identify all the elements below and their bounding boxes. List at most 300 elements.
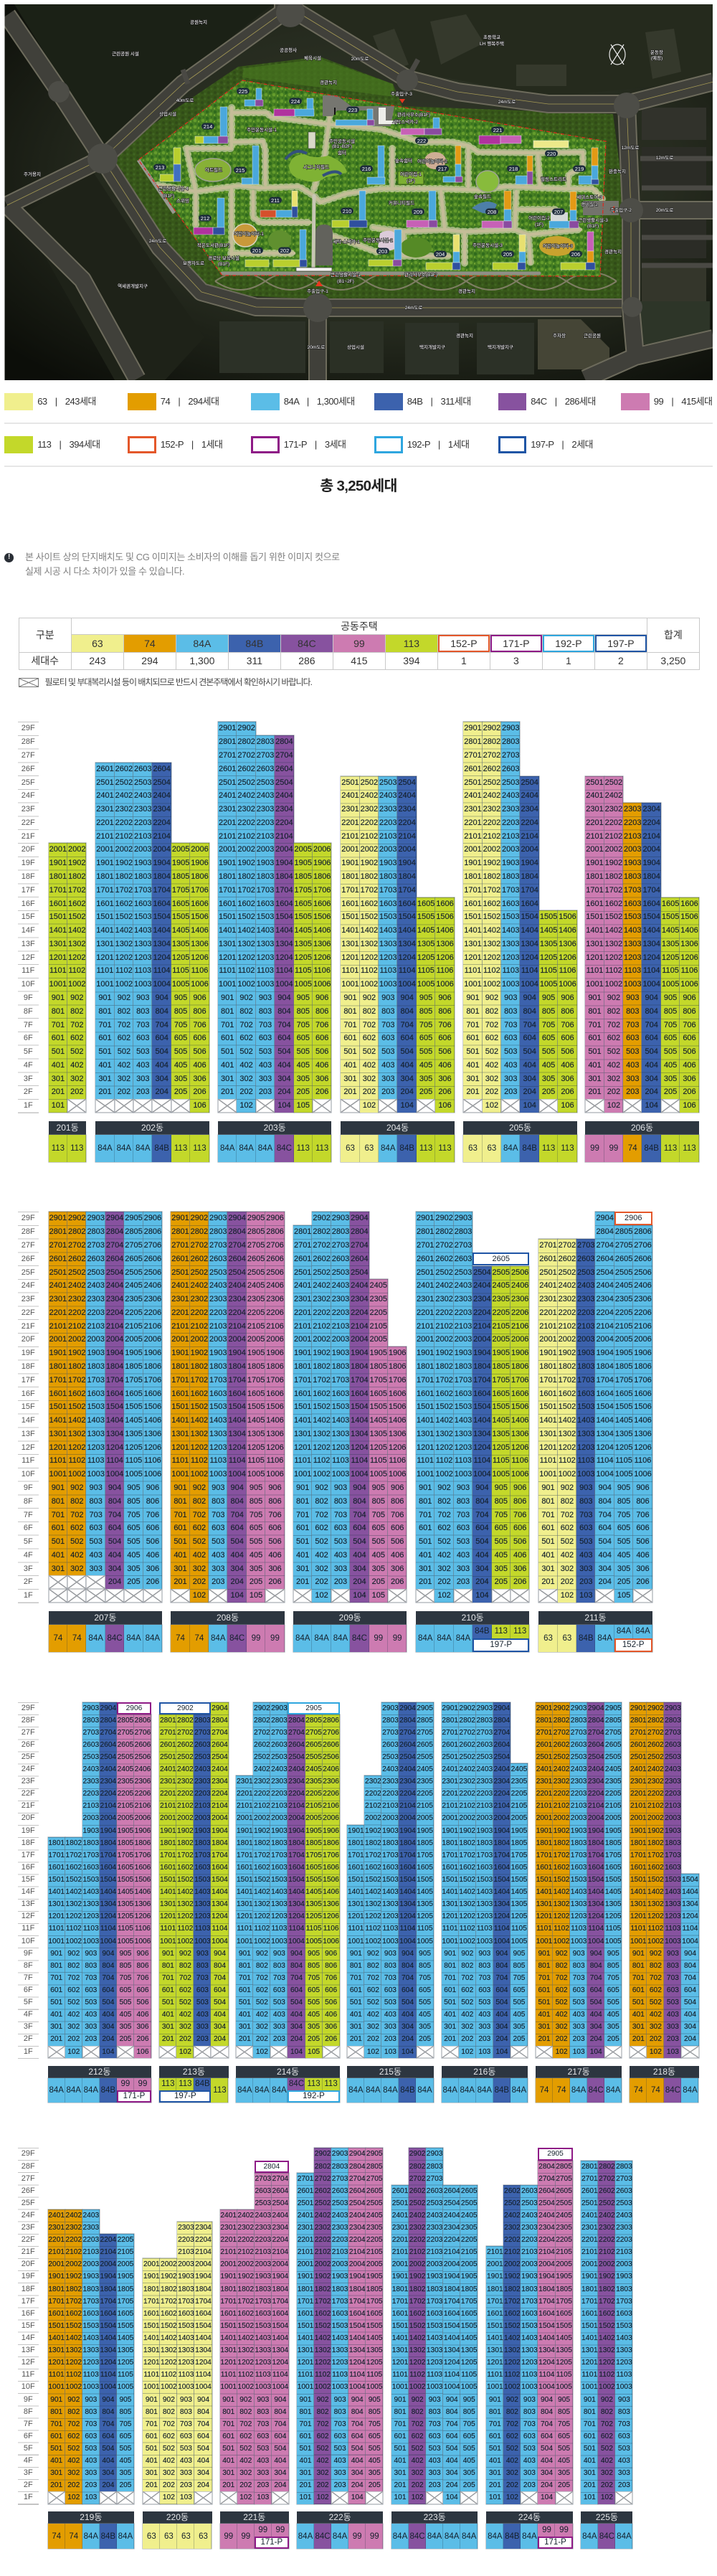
unit types: 84A [98,1144,113,1153]
building 208 [170,1212,171,1652]
unit types [391,2524,478,2549]
building number badges: 217 [438,166,447,172]
building 204 [340,722,341,1162]
building number badges: 213 [156,164,164,171]
unit stack 220 [143,2148,212,2504]
household summary table: 415 [351,655,368,666]
unit types: 74 [69,2532,78,2541]
unit stack 209: 2903 2803 2703 2603 2503 2403 2303 2203 2103 2003 1903 1803 1703 1603 1503 1403 1303 1203 1103 1003 903 803 703 603 503 403 303 203 [332,1214,349,1586]
map place labels: 24m도로 [149,238,166,244]
unit types: 113 [438,1144,452,1153]
unit types: 113 [213,2086,227,2095]
unit stack 217: 2905 2805 2705 2605 2505 2405 2305 2205 2105 2005 1905 1805 1705 1605 1505 1405 1305 1205 1105 1005 905 805 705 605 505 405 305 205 [605,1704,622,2043]
unit stack 222: 2902 2802 2702 2602 2502 2402 2302 2202 2102 2002 1902 1802 1702 1602 1502 1402 1302 1202 1102 1002 902 802 702 602 502 402 302 202 102 [315,2150,331,2501]
map place labels: (B1F) [587,224,599,229]
map place labels: 체육시설 [304,55,321,61]
map place labels: 주출입구-3 [391,90,412,97]
unit stack 220: 2303 2203 2103 2003 1903 1803 1703 1603 1503 1403 1303 1203 1103 1003 903 803 703 603 503 403 303 203 103 [178,2224,194,2501]
unit stack 221: 2703 2603 2503 2403 2303 2203 2103 2003 1903 1803 1703 1603 1503 1403 1303 1203 1103 1003 903 803 703 603 503 403 303 203 103 [255,2175,271,2501]
unit stack 210 [416,1212,529,1603]
building 202 [95,762,210,1163]
map place labels: 어린이놀이터-1 [234,230,264,237]
map place labels: 세탁스낵카-2 [392,118,418,125]
dong name [297,2511,383,2524]
unit stack 210: 2605 [493,1255,510,1263]
unit stack 215: 2904 2804 2704 2604 2504 2404 2304 2204 2104 2004 1904 1804 1704 1604 1504 1404 1304 1204 1104 1004 904 804 704 604 504 404 304 204 104 [399,1704,416,2056]
unit types: 84A [126,1634,141,1643]
unit stack 212 [48,1702,151,2058]
dong name: 219동 [80,2512,102,2522]
unit types: 74 [72,1634,82,1643]
legend 63: 63 | 243세대 [37,396,96,407]
dong name: 217동 [568,2066,590,2076]
building number badges: 207 [554,209,563,215]
map place labels: 근린생활시설-3 [578,217,608,223]
unit stack 208 [171,1212,285,1603]
unit types: 84A [427,2532,442,2541]
dong name: 222동 [329,2512,351,2522]
map place labels: (1F) [407,179,415,184]
unit types: 171-P [544,2538,566,2547]
unit stack 207: 2903 2803 2703 2603 2503 2403 2303 2203 2103 2003 1903 1803 1703 1603 1503 1403 1303 1203 1103 1003 903 803 703 603 503 403 303 [87,1214,105,1573]
building 225 [580,2148,581,2549]
site plan map [4,4,713,380]
unit stack 202: 2604 2504 2404 2304 2204 2104 2004 1904 1804 1704 1604 1504 1404 1304 1204 1104 1004 904 804 704 604 504 404 304 204 [153,765,171,1096]
site area [138,80,606,276]
roads [7,4,713,381]
unit stack 207: 2906 2806 2706 2606 2506 2406 2306 2206 2106 2006 1906 1806 1706 1606 1506 1406 1306 1206 1106 1006 906 806 706 606 506 406 306 206 [144,1214,161,1586]
total households heading: 총 3,250세대 [320,478,397,494]
unit types: 113 [179,2080,192,2088]
building 215 [346,1702,348,2103]
map place labels: 숲속필드 [474,194,491,199]
household summary table: 84A [193,638,211,649]
unit types [463,1135,577,1162]
building 206 [584,722,586,1162]
household summary table: 84B [245,638,263,649]
unit types [48,2077,151,2103]
dong name: 211동 [584,1613,607,1623]
unit types: 74 [52,2532,61,2541]
unit types: 99 [258,2526,267,2534]
unit types: 84A [571,2086,586,2095]
unit types: 84A [49,2086,64,2095]
unit types: 74 [651,2086,660,2095]
unit stack 220: 2304 2204 2104 2004 1904 1804 1704 1604 1504 1404 1304 1204 1104 1004 904 804 704 604 504 404 304 204 [195,2224,212,2489]
unit stack 206: 2303 2203 2103 2003 1903 1803 1703 1603 1503 1403 1303 1203 1103 1003 903 803 703 603 503 403 303 203 [624,805,642,1096]
unit stack 218: 2903 2803 2703 2603 2503 2403 2303 2203 2103 2003 1903 1803 1703 1603 1503 1403 1303 1203 1103 1003 903 803 703 603 503 403 303 203 103 [665,1704,681,2056]
building 207 [48,1212,49,1652]
map place labels: 아트필드 [205,166,222,173]
unit stack 208: 2905 2805 2705 2605 2505 2405 2305 2205 2105 2005 1905 1805 1705 1605 1505 1405 1305 1205 1105 1005 905 805 705 605 505 405 305 205 105 [247,1214,265,1600]
map place labels: 주차장 [553,332,566,339]
building number badges: 204 [436,251,445,258]
unit stack 214: 2905 [305,1704,322,1712]
dong name: 204동 [386,1123,409,1133]
unit types: 84A [333,1634,348,1643]
unit stack 205 [463,722,577,1113]
unit types: 84A [683,2086,698,2095]
unit types [581,2524,632,2549]
unit stack 205: 1505 1405 1305 1205 1105 1005 905 805 705 605 505 405 305 205 [540,912,557,1096]
building number badges: 201 [252,247,261,254]
unit types: 84A [348,2086,364,2095]
household summary table: 공동주택 [341,621,378,632]
unit types: 113 [513,1627,526,1636]
map place labels: 세탁·스낵카-1 [333,238,360,245]
floor labels [18,1212,39,1603]
dong name: 218동 [653,2066,675,2076]
unit stack 214: 2903 2803 2703 2603 2503 2403 2303 2203 2103 2003 1903 1803 1703 1603 1503 1403 1303 1203 1103 1003 903 803 703 603 503 403 303 203 [271,1704,288,2043]
legend 84B [374,393,471,410]
unit types [143,2524,212,2549]
floor labels: 29F 28F 27F 26F 25F 24F 23F 22F 21F 20F 19F 18F 17F 16F 15F 14F 13F 12F 11F 10F 9F 8F 7F 6F 5F 4F 3F 2F 1F [22,1214,35,1600]
dong name [630,2066,699,2077]
unit stack 201: 2002 1902 1802 1702 1602 1502 1402 1302 1202 1102 1002 902 802 702 602 502 402 302 202 [68,845,86,1096]
building number badges: 215 [236,167,244,174]
map place labels: 초등학교 [483,34,500,40]
map place labels: 주출입구-1 [307,288,328,294]
unit types: 84C [277,1144,292,1153]
building 218 [629,1702,630,2103]
unit types: 84A [295,1634,310,1643]
map place labels: 커뮤니티필드 [389,199,414,206]
unit types: 113 [561,1144,574,1153]
unit stack 224: 2603 2503 2403 2303 2203 2103 2003 1903 1803 1703 1603 1503 1403 1303 1203 1103 1003 903 803 703 603 503 403 303 203 [521,2187,538,2489]
map place labels: 상업시설 [347,344,364,350]
unit types: 197-P [490,1641,512,1649]
unit stack 205: 2901 2801 2701 2601 2501 2401 2301 2201 2101 2001 1901 1801 1701 1601 1501 1401 1301 1201 1101 1001 901 801 701 601 501 401 301 201 [464,724,482,1096]
unit types: 84B [495,2086,509,2095]
dong name [391,2511,478,2524]
unit stack 212: 2903 2803 2703 2603 2503 2403 2303 2203 2103 2003 1903 1803 1703 1603 1503 1403 1303 1203 1103 1003 903 803 703 603 503 403 303 203 [82,1704,99,2043]
building number badges: 212 [201,215,209,222]
dong name: 225동 [596,2512,618,2522]
unit stack 212: 2906 [126,1704,142,1712]
unit types: 63 [487,1144,496,1153]
unit types: 84A [88,1634,103,1643]
household summary table: 311 [247,655,262,666]
unit types: 74 [557,2086,566,2095]
unit types: 99 [224,2532,233,2541]
unit stack 205: 2902 2802 2702 2602 2502 2402 2302 2202 2102 2002 1902 1802 1702 1602 1502 1402 1302 1202 1102 1002 902 802 702 602 502 402 302 202 102 [483,724,500,1110]
unit types: 84C [108,1634,123,1643]
map place labels: 24m도로 [498,99,516,105]
unit types [297,2524,383,2549]
dong name [218,1121,331,1135]
unit types: 63 [147,2532,156,2541]
map place labels: 관리사무소(B1F) [404,271,437,278]
unit stack 215: 2302 2202 2102 2002 1902 1802 1702 1602 1502 1402 1302 1202 1102 1002 902 802 702 602 502 402 302 202 102 [365,1778,381,2056]
building 220 [142,2148,143,2549]
unit stack 209: 2902 2802 2702 2602 2502 2402 2302 2202 2102 2002 1902 1802 1702 1602 1502 1402 1302 1202 1102 1002 902 802 702 602 502 402 302 202 102 [313,1214,331,1600]
unit stack 225 [581,2148,632,2504]
legend 152-P [128,436,223,453]
unit stack 204: 2503 2403 2303 2203 2103 2003 1903 1803 1703 1603 1503 1403 1303 1203 1103 1003 903 803 703 603 503 403 303 203 [379,778,397,1096]
unit stack 212: 2806 2706 2606 2506 2406 2306 2206 2106 2006 1906 1806 1706 1606 1506 1406 1306 1206 1106 1006 906 806 706 606 506 406 306 206 106 [135,1717,151,2056]
map place labels: 택지개발지구 [419,344,445,350]
dong name [143,2511,212,2524]
unit types [538,1625,652,1652]
legend 99 [621,393,712,410]
unit types: 84B [399,1144,414,1153]
map place labels: 경비실-2 [581,201,598,207]
floor labels: 29F 28F 27F 26F 25F 24F 23F 22F 21F 20F 19F 18F 17F 16F 15F 14F 13F 12F 11F 10F 9F 8F 7F 6F 5F 4F 3F 2F 1F [22,1703,35,2056]
household summary table: 구분 [36,629,54,641]
household summary table: 294 [141,655,158,666]
unit types [49,1135,86,1162]
map place labels: 경관녹지 [604,248,622,255]
unit types: 74 [194,1634,204,1643]
unit stack 214: 2804 2704 2604 2504 2404 2304 2204 2104 2004 1904 1804 1704 1604 1504 1404 1304 1204 1104 1004 904 804 704 604 504 404 304 204 104 [288,1717,305,2056]
unit types [293,1625,407,1652]
legend 63 [4,393,96,410]
unit stack 214: 2806 2706 2606 2506 2406 2306 2206 2106 2006 1906 1806 1706 1606 1506 1406 1306 1206 1106 1006 906 806 706 606 506 406 306 206 [323,1717,339,2043]
table footnote: 필로티 및 부대복리시설 등이 배치되므로 반드시 견본주택에서 확인하시기 바랍니다. [44,677,312,687]
floor labels [18,722,39,1113]
unit stack 208: 2902 2802 2702 2602 2502 2402 2302 2202 2102 2002 1902 1802 1702 1602 1502 1402 1302 1202 1102 1002 902 802 702 602 502 402 302 202 102 [191,1214,208,1600]
unit stack 217: 2904 2804 2704 2604 2504 2404 2304 2204 2104 2004 1904 1804 1704 1604 1504 1404 1304 1204 1104 1004 904 804 704 604 504 404 304 204 104 [588,1704,604,2056]
unit stack 210: 2902 2802 2702 2602 2502 2402 2302 2202 2102 2002 1902 1802 1702 1602 1502 1402 1302 1202 1102 1002 902 802 702 602 502 402 302 202 102 [435,1214,453,1600]
unit stack 212: 2805 2705 2605 2505 2405 2305 2205 2105 2005 1905 1805 1705 1605 1505 1405 1305 1205 1105 1005 905 805 705 605 505 405 305 205 [118,1717,133,2043]
unit types: 84B [101,2086,115,2095]
map place labels: 주민운동시설-1 [247,126,277,133]
building 203 [217,721,332,1163]
dong name [49,1121,86,1135]
dong name [416,1611,529,1625]
unit types: 84A [239,1144,254,1153]
unit types: 84A [220,1144,234,1153]
unit types: 63 [181,2532,191,2541]
unit stack 214: 2805 2705 2605 2505 2405 2305 2205 2105 2005 1905 1805 1705 1605 1505 1405 1305 1205 1105 1005 905 805 705 605 505 405 305 205 105 [305,1717,322,2056]
unit types: 84A [478,2086,492,2095]
building number badges: 223 [348,107,357,113]
dong name [159,2066,229,2077]
building number badges [153,88,586,258]
dong name [48,2511,134,2524]
dong name: 213동 [183,2066,205,2076]
unit stack 223: 2903 2803 2703 2603 2503 2403 2303 2203 2103 2003 1903 1803 1703 1603 1503 1403 1303 1203 1103 1003 903 803 703 603 503 403 303 203 [427,2150,442,2489]
unit types: 84B [644,1144,659,1153]
map place labels: 근린생활시설-1 [331,271,361,278]
unit types: 63 [562,1634,571,1643]
internal pathways [158,108,602,273]
building number badges: 209 [414,209,422,215]
unit types: 99 [270,1634,280,1643]
legend 84A: 84A | 1,300세대 [284,396,355,407]
map place labels: 경로당 보육시설 [208,255,239,261]
legend 84C [498,393,596,410]
unit stack 224: 2804 2704 2604 2504 2404 2304 2204 2104 2004 1904 1804 1704 1604 1504 1404 1304 1204 1104 1004 904 804 704 604 504 404 304 204 104 [538,2162,555,2501]
unit types: 84A [381,1144,396,1153]
unit stack 202: 2601 2501 2401 2301 2201 2101 2001 1901 1801 1701 1601 1501 1401 1301 1201 1101 1001 901 801 701 601 501 401 301 201 [96,765,114,1096]
unit types: 84A [393,2532,407,2541]
unit stack 213 [159,1702,229,2058]
unit types: 99 [120,2080,130,2088]
map place labels: 상업시설 [159,110,176,117]
dong name: 202동 [141,1123,163,1133]
unit stack 207: 2904 2804 2704 2604 2504 2404 2304 2204 2104 2004 1904 1804 1704 1604 1504 1404 1304 1204 1104 1004 904 804 704 604 504 404 304 204 [106,1214,123,1586]
household summary table: 합계 [664,629,683,641]
unit stack 219: 2402 2302 2202 2102 2002 1902 1802 1702 1602 1502 1402 1302 1202 1102 1002 902 802 702 602 502 402 302 202 102 [65,2212,82,2501]
unit stack 213: 2802 2702 2602 2502 2402 2302 2202 2102 2002 1902 1802 1702 1602 1502 1402 1302 1202 1102 1002 902 802 702 602 502 402 302 202 102 [177,1717,194,2056]
map place labels: 역세권개발지구 [118,283,148,289]
unit types: 84A [117,1144,131,1153]
unit types [236,2077,340,2103]
unit types: 84A [255,2086,270,2095]
unit types: 84A [136,1144,151,1153]
household summary table: 3,250 [660,655,685,666]
building 217 [535,1702,536,2103]
unit stack 221: 2401 2301 2201 2101 2001 1901 1801 1701 1601 1501 1401 1301 1201 1101 1001 901 801 701 601 501 401 301 201 [220,2212,237,2489]
panel: floor chart 212-218 [0,1702,717,2103]
unit stack 206: 2304 2204 2104 2004 1904 1804 1704 1604 1504 1404 1304 1204 1104 1004 904 804 704 604 504 404 304 204 104 [642,805,660,1110]
unit types: 113 [495,1627,508,1636]
map place labels: 경관녹지 [320,79,337,85]
building 219 [47,2148,49,2549]
household summary table [19,618,700,670]
map place labels: (B1F) [218,262,229,267]
unit types: 84A [456,1634,470,1643]
unit stack 218 [630,1702,699,2058]
unit stack 219: 2403 2303 2203 2103 2003 1903 1803 1703 1603 1503 1403 1303 1203 1103 1003 903 803 703 603 503 403 303 203 103 [82,2212,99,2501]
unit types: 84A [522,2532,537,2541]
unit stack 217: 2902 2802 2702 2602 2502 2402 2302 2202 2102 2002 1902 1802 1702 1602 1502 1402 1302 1202 1102 1002 902 802 702 602 502 402 302 202 102 [554,1704,569,2056]
unit types: 84A [366,2086,381,2095]
dong name [341,1121,455,1135]
icon: notice [4,553,14,562]
unit stack 204: 1606 1506 1406 1306 1206 1106 1006 906 806 706 606 506 406 306 206 106 [436,900,454,1110]
unit types: 99 [559,2526,569,2534]
unit stack 224 [486,2148,573,2504]
map place labels: 주민운동시설-3 [473,242,503,248]
building 221 [219,2148,221,2549]
legend row 2 [4,436,593,453]
unit types: 74 [53,1634,62,1643]
unit stack 225: 2802 2702 2602 2502 2402 2302 2202 2102 2002 1902 1802 1702 1602 1502 1402 1302 1202 1102 1002 902 802 702 602 502 402 302 202 102 [599,2162,615,2501]
unit types: 84A [460,2086,475,2095]
dong name: 221동 [243,2512,265,2522]
building number badges: 218 [509,166,518,172]
unit stack 202: 2603 2503 2403 2303 2203 2103 2003 1903 1803 1703 1603 1503 1403 1303 1203 1103 1003 903 803 703 603 503 403 303 203 [134,765,152,1096]
unit types: 113 [174,1144,187,1153]
household summary table: 3 [513,655,519,666]
household summary table: 1,300 [189,655,214,666]
unit types: 84A [237,2086,252,2095]
dong name: 220동 [166,2512,189,2522]
unit types: 84A [258,1144,272,1153]
unit stack 223: 2601 2501 2401 2301 2201 2101 2001 1901 1801 1701 1601 1501 1401 1301 1201 1101 1001 901 801 701 601 501 401 301 201 101 [392,2187,408,2501]
unit types: 84A [635,1627,650,1636]
map place labels: 쉼터 [338,149,346,156]
unit types: 113 [161,2080,174,2088]
unit types [486,2524,573,2549]
unit stack 208: 2903 2803 2703 2603 2503 2403 2303 2203 2103 2003 1903 1803 1703 1603 1503 1403 1303 1203 1103 1003 903 803 703 603 503 403 303 203 [209,1214,227,1586]
building number badges: 225 [239,88,247,95]
map place labels: 어린이놀이터-3 [543,242,573,249]
dong name: 212동 [88,2066,110,2076]
unit types: 84A [383,2086,398,2095]
household summary table: 99 [353,638,365,649]
map place labels: 세대스토어-3 [576,194,602,200]
unit stack 209: 1906 1806 1706 1606 1506 1406 1306 1206 1106 1006 906 806 706 606 506 406 306 206 [389,1349,406,1586]
unit stack 212: 2904 2804 2704 2604 2504 2404 2304 2204 2104 2004 1904 1804 1704 1604 1504 1404 1304 1204 1104 1004 904 804 704 604 504 404 304 204 104 [100,1704,116,2056]
unit stack 218: 1504 1404 1304 1204 1104 1004 904 804 704 604 504 404 304 204 [682,1876,698,2043]
unit stack 216: 2901 2801 2701 2601 2501 2401 2301 2201 2101 2001 1901 1801 1701 1601 1501 1401 1301 1201 1101 1001 901 801 701 601 501 401 301 201 [442,1704,458,2043]
unit types: 113 [683,1144,696,1153]
unit stack 222: 2701 2601 2501 2401 2301 2201 2101 2001 1901 1801 1701 1601 1501 1401 1301 1201 1101 1001 901 801 701 601 501 401 301 201 101 [298,2175,313,2501]
unit stack 214 [236,1702,340,2058]
legend 74 [128,393,219,410]
unit stack 221: 2704 2604 2504 2404 2304 2204 2104 2004 1904 1804 1704 1604 1504 1404 1304 1204 1104 1004 904 804 704 604 504 404 304 204 [272,2175,288,2489]
map place labels: 경관녹지 [456,332,473,339]
unit stack 214: 2902 2802 2702 2602 2502 2402 2302 2202 2102 2002 1902 1802 1702 1602 1502 1402 1302 1202 1102 1002 902 802 702 602 502 402 302 202 102 [254,1704,270,2056]
household summary table: 243 [89,655,106,666]
household summary table: 84C [298,638,316,649]
unit stack 213: 2902 [177,1704,194,1712]
building number badges: 221 [493,127,502,133]
building 223 [391,2148,392,2549]
dong name: 215동 [379,2066,402,2076]
building 201 [48,842,87,1163]
map place labels: (B1~2F) [337,279,354,284]
unit types: 113 [324,2080,338,2088]
panel: floor chart 201-206 [18,721,700,1163]
parking ramps and entrances [138,95,619,271]
dong name: 203동 [264,1123,286,1133]
unit stack 211: 2904 2804 2704 2604 2504 2404 2304 2204 2104 2004 1904 1804 1704 1604 1504 1404 1304 1204 1104 1004 904 804 704 604 504 404 304 204 [596,1214,614,1586]
unit types: 84A [503,1144,518,1153]
unit types [159,2077,228,2103]
green park belt [110,57,624,299]
unit stack 207: 2901 2801 2701 2601 2501 2401 2301 2201 2101 2001 1901 1801 1701 1601 1501 1401 1301 1201 1101 1001 901 801 701 601 501 401 301 [49,1214,67,1573]
unit types: 63 [364,1144,374,1153]
unit stack 213: 2803 2703 2603 2503 2403 2303 2203 2103 2003 1903 1803 1703 1603 1503 1403 1303 1203 1103 1003 903 803 703 603 503 403 303 203 [194,1717,211,2043]
map place labels: (예정) [651,55,663,61]
unit stack 220: 2001 1901 1801 1701 1601 1501 1401 1301 1201 1101 1001 901 801 701 601 501 401 301 201 [143,2260,160,2489]
unit types: 84A [582,2532,597,2541]
unit types: 99 [275,2526,285,2534]
legend 171-P: 171-P | 3세대 [284,439,346,450]
legend 84C: 84C | 286세대 [531,396,596,407]
unit stack 210: 2901 2801 2701 2601 2501 2401 2301 2201 2101 2001 1901 1801 1701 1601 1501 1401 1301 1201 1101 1001 901 801 701 601 501 401 301 201 [417,1214,434,1586]
household summary table: 세대수 [31,655,59,666]
residential buildings [160,88,599,270]
unit stack 225: 2801 2701 2601 2501 2401 2301 2201 2101 2001 1901 1801 1701 1601 1501 1401 1301 1201 1101 1001 901 801 701 601 501 401 301 201 101 [581,2162,598,2501]
legend 99: 99 | 415세대 [654,396,712,407]
unit types [95,1135,209,1162]
legend 192-P: 192-P | 1세대 [407,439,470,450]
unit types: 197-P [174,2092,196,2100]
unit stack 204: 2504 2404 2304 2204 2104 2004 1904 1804 1704 1604 1504 1404 1304 1204 1104 1004 904 804 704 604 504 404 304 204 104 [398,778,416,1110]
unit stack 206 [585,722,699,1113]
site boundary [138,80,606,276]
unit stack 216: 2405 2305 2205 2105 2005 1905 1805 1705 1605 1505 1405 1305 1205 1105 1005 905 805 705 605 505 405 305 205 [511,1765,527,2043]
unit stack 206: 1605 1505 1405 1305 1205 1105 1005 905 805 705 605 505 405 305 205 [662,900,679,1096]
map place labels: 관리사무소(B1F) [397,111,430,118]
unit stack 221 [220,2148,289,2504]
map place labels: 어린이집-2 [528,214,550,221]
unit stack 210: 2506 2406 2306 2206 2106 2006 1906 1806 1706 1606 1506 1406 1306 1206 1106 1006 906 806 706 606 506 406 306 206 [511,1268,528,1586]
unit types: 113 [542,1144,555,1153]
legend row 1 [4,393,712,410]
surrounding city blocks [14,4,713,380]
legend 113 [4,436,100,453]
dong name [463,1121,577,1135]
unit stack 213: 2801 2701 2601 2501 2401 2301 2201 2101 2001 1901 1801 1701 1601 1501 1401 1301 1201 1101 1001 901 801 701 601 501 401 301 201 [160,1717,176,2043]
unit types: 113 [52,1144,65,1153]
unit stack 216: 2902 2802 2702 2602 2502 2402 2302 2202 2102 2002 1902 1802 1702 1602 1502 1402 1302 1202 1102 1002 902 802 702 602 502 402 302 202 102 [459,1704,475,2056]
